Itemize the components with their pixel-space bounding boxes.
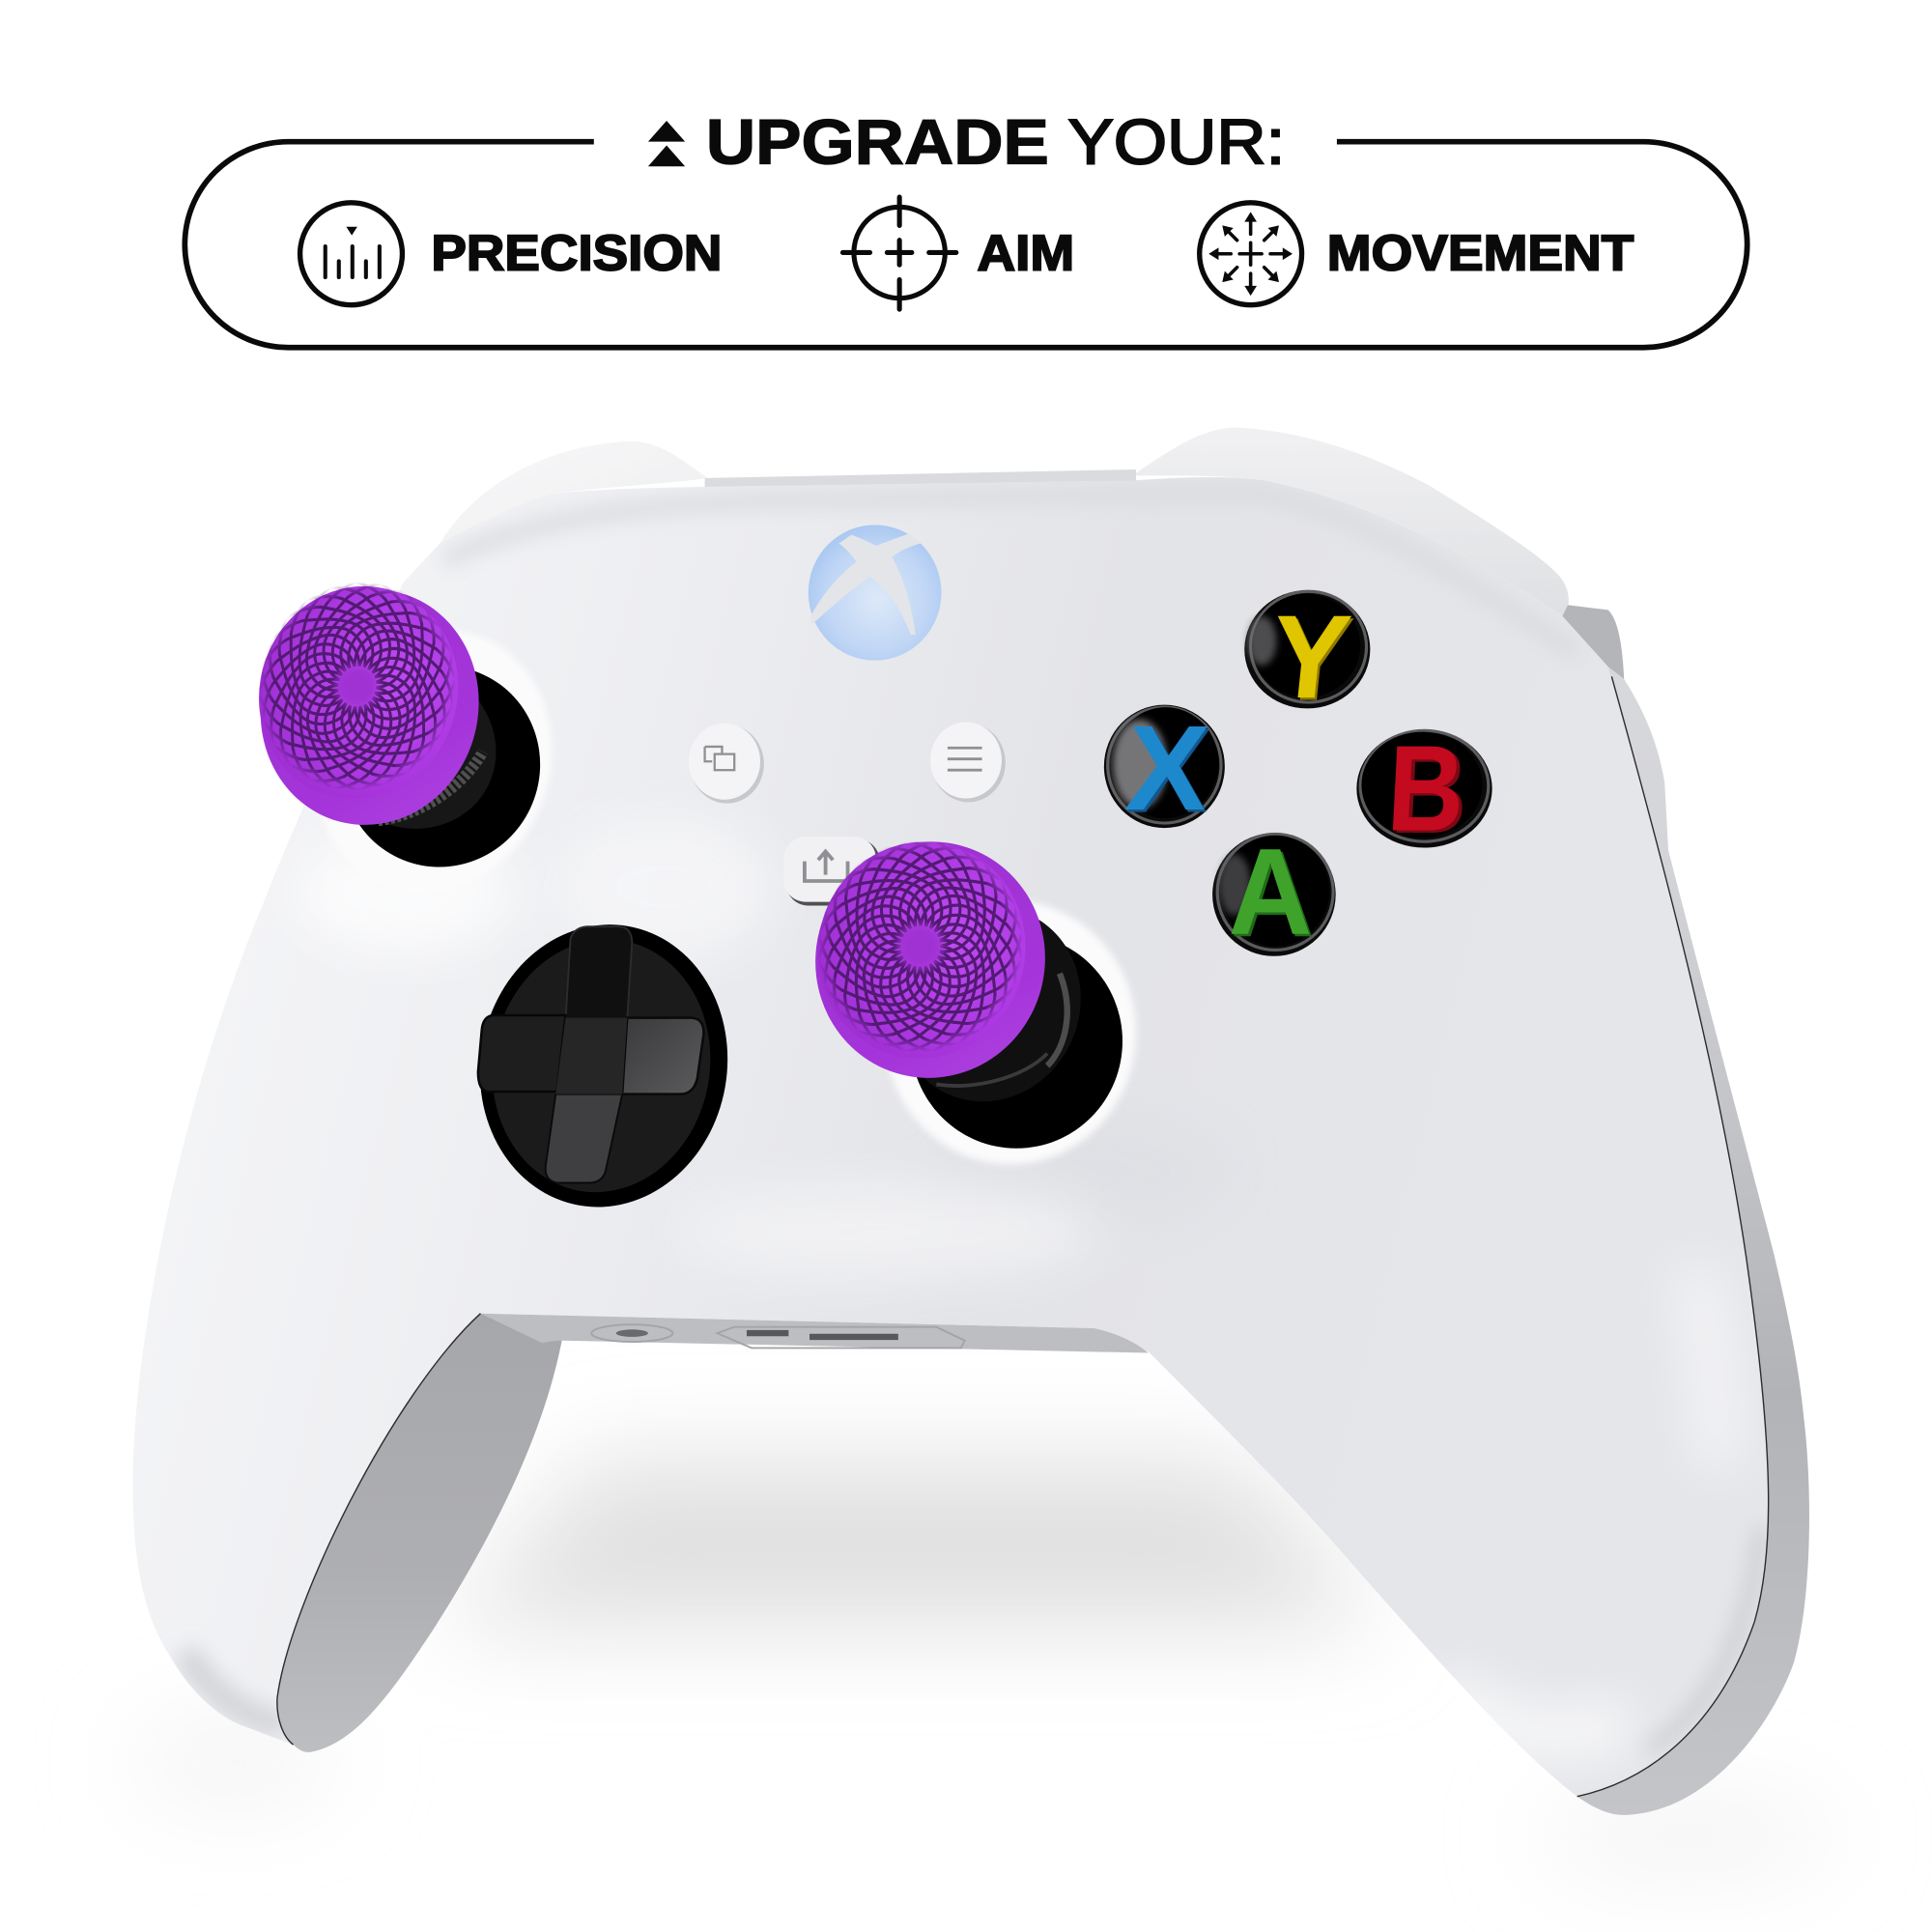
cap centre disc: [336, 666, 379, 707]
d-pad arm up: [565, 926, 632, 1020]
floor shadow: [135, 1460, 1836, 1861]
button y: Y: [1264, 591, 1356, 724]
title: UPGRADE YOUR:: [706, 107, 1285, 179]
d-pad arm down: [546, 1094, 622, 1182]
button a: A: [1231, 826, 1315, 963]
cap rim: [789, 816, 1071, 1104]
port details: [591, 1324, 965, 1348]
left bumper: [440, 441, 707, 543]
d-pad: [458, 905, 750, 1227]
stem: [292, 631, 526, 861]
cap centre disc: [898, 924, 943, 969]
header panel: upgrade your: [185, 107, 1747, 348]
label: aim: AIM: [977, 225, 1074, 281]
controller: [132, 428, 1809, 1815]
right nub: [1562, 605, 1624, 679]
stem: [864, 876, 1113, 1132]
menu button: [930, 722, 1006, 802]
icon: aim crosshair: [842, 197, 956, 309]
shell seam lines: [277, 676, 1769, 1797]
icon: double up arrow: [648, 121, 685, 166]
cap face: [229, 558, 488, 827]
share button: [783, 837, 880, 906]
button b: B: [1384, 721, 1468, 857]
label: precision: PRECISION: [431, 225, 722, 281]
d-pad arm right: [622, 1018, 703, 1094]
right stick: [815, 840, 1138, 1166]
cap rim: [235, 565, 505, 849]
pill outline: [185, 142, 1747, 348]
right side edge: [1479, 610, 1809, 1815]
d-pad centre: [555, 1018, 627, 1094]
icon: precision: [300, 203, 402, 305]
cap lattice: [819, 840, 1022, 1051]
front shell: [132, 477, 1769, 1797]
left grip inner: [277, 1314, 579, 1752]
stick well: [885, 900, 1136, 1164]
label: movement: MOVEMENT: [1327, 225, 1634, 281]
left stick: [259, 582, 551, 867]
view button: [689, 724, 764, 804]
top strip: [705, 469, 1136, 491]
bottom ledge: [480, 1314, 1149, 1353]
cap lattice: [261, 582, 454, 790]
button x: X: [1124, 703, 1215, 838]
soft surface shading: [185, 493, 1762, 1749]
button a: A: [1229, 824, 1312, 961]
button x: X: [1122, 700, 1212, 836]
d-pad arm left: [478, 1015, 565, 1092]
right bumper: [1132, 428, 1569, 616]
button b: B: [1388, 723, 1471, 859]
icon: movement arrows: [1200, 203, 1302, 305]
button b: [1356, 721, 1492, 859]
button y: Y: [1266, 594, 1358, 725]
cap face: [794, 818, 1050, 1082]
icon: xbox logo: [809, 525, 941, 661]
stick well: [279, 597, 588, 926]
